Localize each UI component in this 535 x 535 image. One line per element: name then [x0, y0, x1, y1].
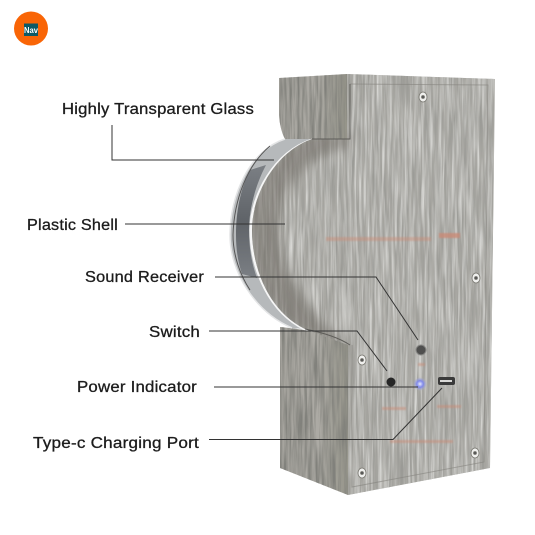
- printed markings: [326, 233, 461, 443]
- curved inner shell shading: [245, 132, 352, 350]
- leader: glass: [112, 125, 274, 160]
- label: Type-c Charging Port: Type-c Charging Port: [33, 435, 200, 452]
- label: Sound Receiver: Sound Receiver: [85, 269, 204, 286]
- top block side face: [279, 74, 347, 139]
- leader: receiver: [215, 277, 418, 340]
- power LED: [414, 378, 426, 390]
- leader: shell: [125, 223, 285, 225]
- bottom block side face: [280, 327, 348, 495]
- switch button: [386, 378, 396, 386]
- screws: [358, 92, 480, 478]
- label: Power Indicator: Power Indicator: [77, 379, 197, 396]
- leader: switch: [209, 331, 387, 371]
- label: Plastic Shell: Plastic Shell: [27, 217, 118, 234]
- glass and shell ring: [230, 139, 312, 329]
- leader: port: [209, 388, 442, 440]
- label: Highly Transparent Glass: Highly Transparent Glass: [62, 101, 254, 118]
- logo: Nav badge: [14, 12, 48, 46]
- product: wooden speaker: [230, 70, 500, 500]
- sound receiver hole: [416, 345, 426, 355]
- type-c port: [438, 377, 455, 385]
- label: Switch: Switch: [149, 324, 200, 341]
- logo: Nav badge: Nav: [24, 26, 39, 35]
- main front face: [245, 70, 500, 500]
- leader: power: [214, 386, 418, 388]
